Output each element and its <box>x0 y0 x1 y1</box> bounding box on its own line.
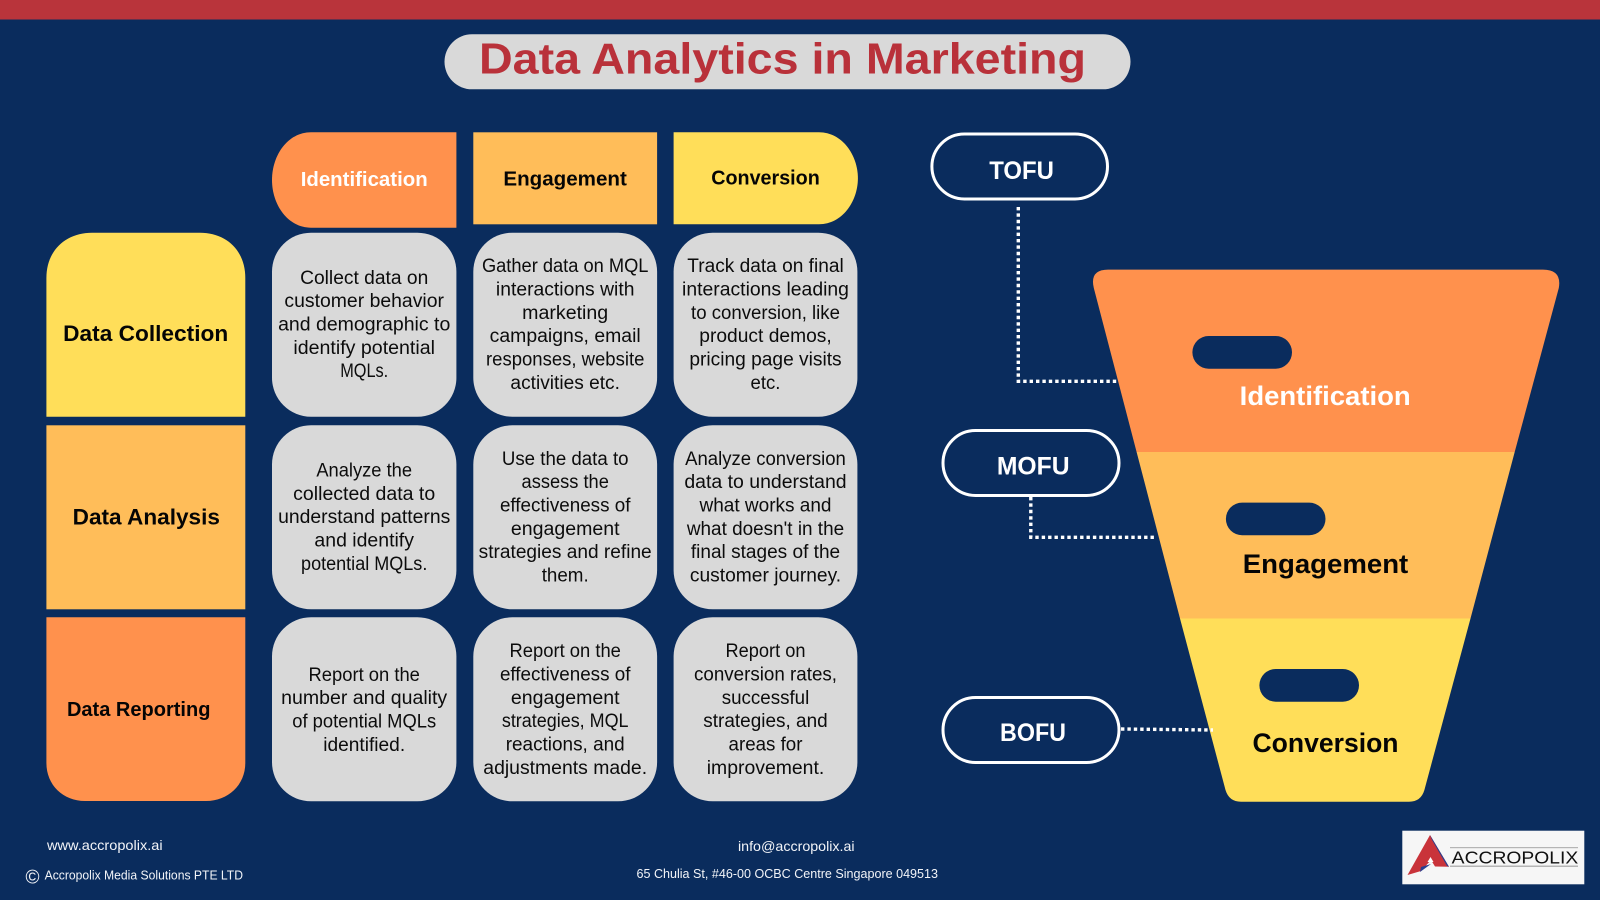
cell: Data Reporting / Conversion <box>674 617 857 801</box>
row header: Data Reporting: Data Reporting <box>67 698 210 721</box>
funnel stage: Conversion: Conversion <box>1252 728 1398 758</box>
cell: Data Collection / Identification: and demographic to <box>278 315 450 336</box>
cell: Data Collection / Engagement: marketing <box>522 303 608 324</box>
cell: Data Reporting / Conversion: improvement. <box>707 758 824 779</box>
footer: copyright <box>26 868 243 888</box>
matrix table <box>46 132 858 801</box>
cell: Data Analysis / Engagement: them. <box>542 566 589 587</box>
cell: Data Analysis / Engagement: strategies and refine <box>479 542 652 563</box>
cell: Data Collection / Conversion: product demos, <box>699 326 832 347</box>
cell: Data Reporting / Conversion: areas for <box>729 735 803 756</box>
cell: Data Reporting / Identification: identified. <box>323 735 405 756</box>
column header: Engagement <box>473 132 657 224</box>
connector: TOFU to Identification <box>1018 207 1119 381</box>
top bar <box>0 0 1600 20</box>
cell: Data Analysis / Identification: potential MQLs. <box>301 554 427 575</box>
footer: address: 65 Chulia St, #46-00 OCBC Centre Singapore 049513 <box>636 867 938 881</box>
row header: Data Reporting <box>46 617 245 801</box>
funnel stage: Engagement: Engagement <box>1243 549 1408 579</box>
title: Data Analytics in Marketing <box>479 34 1086 83</box>
cell: Data Analysis / Engagement <box>473 425 657 609</box>
cell: Data Analysis / Identification: and identify <box>314 531 414 552</box>
cell: Data Analysis / Engagement: Use the data to <box>502 449 629 470</box>
cell: Data Reporting / Conversion: conversion rates, <box>694 665 837 686</box>
cell: Data Collection / Engagement: interactions with <box>496 280 634 301</box>
cell: Data Collection / Conversion <box>674 233 857 417</box>
cell: Data Collection / Conversion: Track data on final <box>687 256 844 277</box>
cell: Data Reporting / Engagement: engagement <box>511 688 620 709</box>
cell: Data Collection / Engagement: responses, website <box>486 350 644 371</box>
cell: Data Analysis / Conversion: data to understand <box>684 472 847 493</box>
label: BOFU: BOFU <box>1000 719 1066 747</box>
label: TOFU: TOFU <box>989 157 1054 185</box>
cell: Data Reporting / Identification: Report on the <box>308 665 420 686</box>
column header: Conversion: Conversion <box>711 167 820 190</box>
cell: Data Analysis / Engagement: effectiveness of <box>500 496 631 517</box>
cell: Data Collection / Identification <box>272 233 456 417</box>
cell: Data Collection / Engagement: campaigns, email <box>490 326 641 347</box>
cell: Data Collection / Engagement: activities etc. <box>510 373 620 394</box>
column header: Conversion <box>674 132 858 224</box>
row header: Data Analysis <box>46 425 245 609</box>
label: BOFU <box>943 698 1119 762</box>
cell: Data Analysis / Conversion: what doesn't in the <box>686 519 844 540</box>
cell: Data Reporting / Conversion: Report on <box>726 641 806 662</box>
cell: Data Reporting / Engagement: adjustments made. <box>483 758 647 779</box>
label: MOFU <box>943 430 1119 496</box>
connector: BOFU to Conversion <box>1121 729 1213 730</box>
cell: Data Collection / Engagement: Gather data on MQL <box>482 256 648 277</box>
funnel diagram <box>1093 270 1559 802</box>
column header: Identification: Identification <box>301 168 428 191</box>
cell: Data Reporting / Conversion: successful <box>722 688 809 709</box>
icon: Accropolix A mark <box>1408 835 1449 875</box>
cell: Data Analysis / Identification: understand patterns <box>278 507 450 528</box>
row header: Data Collection: Data Collection <box>63 321 228 346</box>
cell: Data Reporting / Identification: number and quality <box>281 688 448 709</box>
footer: website: www.accropolix.ai <box>46 837 163 853</box>
label: TOFU <box>932 134 1108 199</box>
cell: Data Collection / Identification: customer behavior <box>284 291 445 312</box>
footer: copyright: Accropolix Media Solutions PTE LTD <box>45 868 243 882</box>
cell: Data Reporting / Engagement <box>473 617 657 801</box>
connector: MOFU to Engagement <box>1031 497 1156 537</box>
cell: Data Reporting / Conversion: strategies, and <box>703 711 828 732</box>
row header: Data Analysis: Data Analysis <box>73 504 220 529</box>
cell: Data Collection / Conversion: to conversion, like <box>691 303 840 324</box>
cell: Data Analysis / Engagement: assess the <box>522 472 609 493</box>
column header: Engagement: Engagement <box>503 167 627 190</box>
cell: Data Reporting / Identification: of potential MQLs <box>292 712 436 733</box>
cell: Data Reporting / Engagement: effectiveness of <box>500 665 631 686</box>
cell: Data Collection / Conversion: etc. <box>751 373 780 394</box>
cell: Data Analysis / Identification: Analyze the <box>316 461 412 482</box>
logo <box>1402 831 1584 884</box>
cell: Data Analysis / Conversion: Analyze conversion <box>685 449 846 470</box>
cell: Data Reporting / Engagement: reactions, and <box>506 735 625 756</box>
funnel stage: Conversion <box>1180 618 1470 802</box>
funnel stage: Engagement <box>1137 452 1515 618</box>
cell: Data Collection / Identification: Collect data on <box>300 268 428 289</box>
cell: Data Collection / Engagement <box>473 233 657 417</box>
cell: Data Analysis / Conversion <box>674 425 857 609</box>
cell: Data Analysis / Identification: collected data to <box>293 484 435 505</box>
cell: Data Collection / Conversion: interactions leading <box>682 280 849 301</box>
cell: Data Collection / Identification: identify potential <box>293 338 435 359</box>
cell: Data Analysis / Conversion: customer journey. <box>690 566 841 587</box>
cell: Data Reporting / Engagement: Report on the <box>510 641 621 662</box>
funnel stage: Identification: Identification <box>1240 381 1411 411</box>
logo: ACCROPOLIX <box>1452 847 1579 867</box>
cell: Data Analysis / Conversion: final stages of the <box>691 542 840 563</box>
cell: Data Analysis / Identification <box>272 425 456 609</box>
funnel stage: Identification <box>1093 270 1559 452</box>
cell: Data Reporting / Identification <box>272 617 456 801</box>
cell: Data Analysis / Conversion: what works and <box>699 496 832 517</box>
column header: Identification <box>272 132 456 228</box>
cell: Data Collection / Identification: MQLs. <box>340 361 388 382</box>
cell: Data Analysis / Engagement: engagement <box>511 519 620 540</box>
footer: email: info@accropolix.ai <box>738 838 855 854</box>
footer: copyright: © <box>26 868 40 888</box>
cell: Data Collection / Conversion: pricing page visits <box>689 350 842 371</box>
cell: Data Reporting / Engagement: strategies, MQL <box>502 711 629 732</box>
row header: Data Collection <box>46 233 245 417</box>
label: MOFU: MOFU <box>997 452 1070 480</box>
